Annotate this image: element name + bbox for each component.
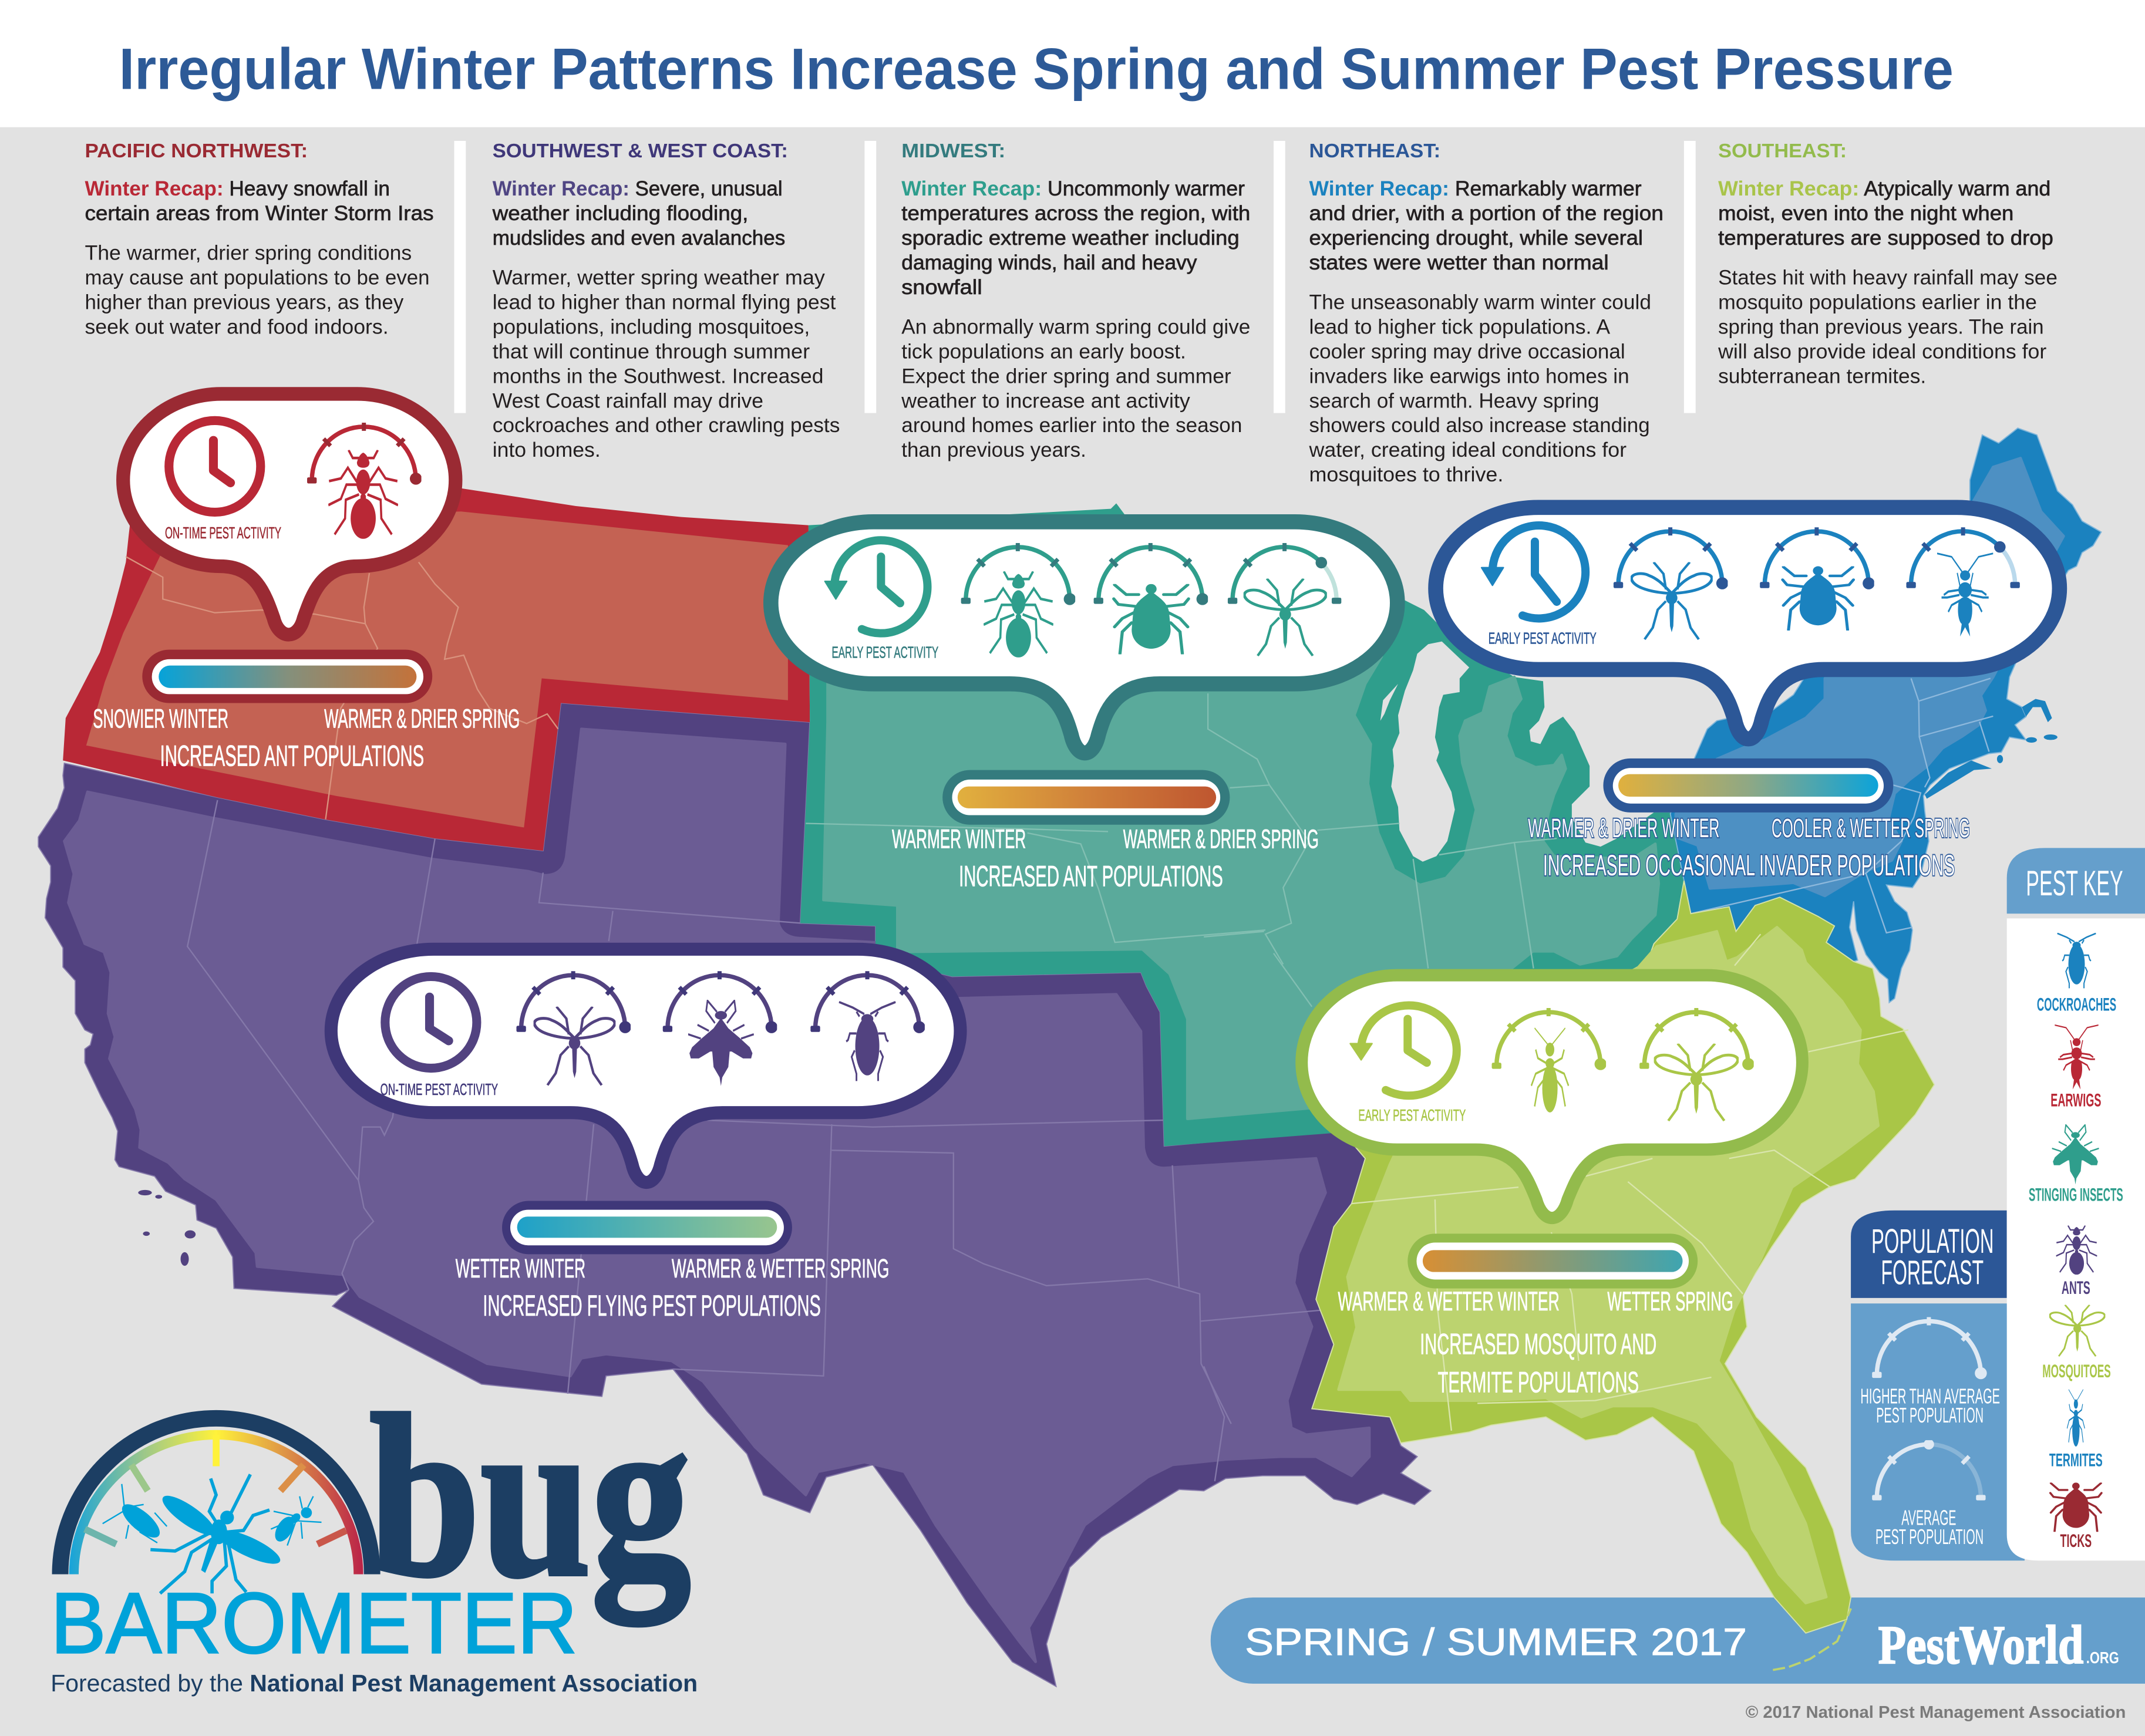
text block: Southeast: moist, even into the night when <box>1718 202 2013 225</box>
termites: TERMITES <box>2049 1449 2103 1470</box>
region: pacific northwest <box>63 465 810 851</box>
region: northeast <box>1671 428 2101 1003</box>
text block: Southeast: SOUTHEAST: <box>1718 140 1847 162</box>
text block: Pacific Northwest: The warmer, drier spring conditions <box>85 242 412 265</box>
text block: Southwest and West Coast <box>492 140 840 461</box>
text block: Northeast: states were wetter than normal <box>1309 251 1609 274</box>
panel: population forecast <box>1851 1211 2025 1560</box>
label: activity: EARLY PEST ACTIVITY <box>831 643 938 662</box>
forecast bar: Southwest <box>502 1201 792 1254</box>
text block: Southeast <box>1718 140 2058 387</box>
icon: gauge and termite <box>1492 1008 1607 1113</box>
callout: Southeast <box>1302 975 1802 1218</box>
heading: FORECAST <box>1881 1254 1984 1292</box>
season banner <box>1211 1597 2145 1684</box>
icon: early clock <box>825 540 928 633</box>
tagline: Forecasted by the National Pest Management Association <box>50 1670 698 1697</box>
region: midwest <box>800 503 1685 1146</box>
forecast labels: Southeast: WARMER & WETTER WINTER <box>1338 1286 1560 1316</box>
text block: Southeast: mosquito populations earlier in the <box>1718 291 2037 314</box>
text block: Southeast: will also provide ideal conditions for <box>1718 340 2047 363</box>
region: southeast <box>1312 881 1934 1633</box>
forecast labels: Southeast: WETTER SPRING <box>1607 1286 1733 1316</box>
text block: Midwest: An abnormally warm spring could give <box>901 315 1250 338</box>
text block: Northeast: search of warmth. Heavy spring <box>1309 389 1599 412</box>
text block: Northeast: water, creating ideal conditions for <box>1309 439 1627 461</box>
icon: gauge and ant <box>961 543 1076 658</box>
stinging insects <box>2029 1125 2123 1205</box>
gauge: average: PEST POPULATION <box>1875 1525 1984 1549</box>
speech bubble <box>771 522 1398 753</box>
icon: gauge and ant <box>307 423 422 539</box>
PestWorld logo: PestWorld <box>1878 1615 2083 1676</box>
forecast labels: Midwest: INCREASED ANT POPULATIONS <box>959 860 1223 893</box>
forecast labels: Pacific Northwest: WARMER & DRIER SPRING <box>324 703 520 733</box>
heading <box>1851 1211 2007 1298</box>
text block: Midwest: damaging winds, hail and heavy <box>901 251 1197 274</box>
text block: Southwest and West Coast: months in the Southwest. Increased <box>493 365 823 387</box>
heading <box>2007 848 2145 913</box>
text block: Midwest: temperatures across the region, with <box>901 202 1250 225</box>
text block: Southwest and West Coast: that will continue through summer <box>493 340 810 363</box>
text block: Southwest and West Coast: populations, including mosquitoes, <box>493 315 810 338</box>
icon: gauge and tick <box>1094 543 1208 653</box>
text block: Northeast: NORTHEAST: <box>1309 140 1440 162</box>
logo mosquito <box>150 1474 284 1593</box>
forecast labels: Midwest <box>892 824 1319 893</box>
text block: Southwest and West Coast: SOUTHWEST & WEST COAST: <box>493 140 788 162</box>
icon: gauge and cockroach <box>810 971 925 1081</box>
text block: Northeast: Winter Recap: Remarkably warmer <box>1309 177 1642 200</box>
forecast labels: Midwest: WARMER & DRIER SPRING <box>1123 824 1319 854</box>
column dividers <box>454 141 1696 413</box>
text block: Southwest and West Coast: Warmer, wetter spring weather may <box>493 267 825 289</box>
text block: Southeast: temperatures are supposed to drop <box>1718 227 2053 250</box>
text block: Pacific Northwest: Winter Recap: Heavy snowfall in <box>85 177 390 200</box>
earwigs: EARWIGS <box>2050 1090 2101 1111</box>
callout: Northeast <box>1436 507 2059 739</box>
Florida Keys <box>1773 1609 1851 1670</box>
icon: early clock <box>1481 525 1585 618</box>
gauge: higher than average: HIGHER THAN AVERAGE <box>1860 1384 2000 1408</box>
text block: Northeast: and drier, with a portion of the region <box>1309 202 1664 225</box>
ticks: TICKS <box>2060 1530 2092 1551</box>
text block: Pacific Northwest: seek out water and food indoors. <box>85 315 389 338</box>
text block: Southeast: spring than previous years. The rain <box>1718 315 2044 338</box>
forecast bar: Southeast <box>1407 1233 1698 1289</box>
copyright: © 2017 National Pest Management Association <box>1746 1703 2126 1722</box>
text block: Southwest and West Coast: into homes. <box>493 439 601 461</box>
speech bubble <box>1436 507 2059 739</box>
text block: Southwest and West Coast: Winter Recap: Severe, unusual <box>493 177 783 200</box>
cockroaches <box>2037 933 2116 1015</box>
text block: Midwest: Expect the drier spring and summer <box>901 365 1231 387</box>
ticks <box>2050 1482 2102 1551</box>
icon: clock <box>385 976 477 1068</box>
logo cockroach <box>103 1484 167 1543</box>
icon: gauge and earwig <box>1906 527 2020 636</box>
text block: Midwest: sporadic extreme weather including <box>901 227 1240 250</box>
forecast bar: Pacific Northwest <box>142 650 432 703</box>
icon: clock <box>169 420 261 512</box>
heading: POPULATION <box>1871 1222 1994 1260</box>
icon: gauge and mosquito <box>1228 543 1341 656</box>
text block: Northeast: cooler spring may drive occasional <box>1309 340 1625 363</box>
logo ant <box>271 1496 321 1546</box>
forecast labels: Southwest: WETTER WINTER <box>456 1253 585 1283</box>
gauge: higher than average <box>1860 1317 2000 1427</box>
text block: Southwest and West Coast: cockroaches and other crawling pests <box>493 414 840 437</box>
forecast labels: Pacific Northwest: INCREASED ANT POPULATIONS <box>160 740 424 773</box>
icon: gauge and mosquito <box>1614 527 1728 639</box>
California islands <box>138 1190 196 1266</box>
icon: gauge and mosquito <box>1639 1008 1755 1121</box>
text block: Southwest and West Coast: mudslides and even avalanches <box>493 227 785 250</box>
text block: Midwest: snowfall <box>901 276 982 299</box>
callout: Pacific Northwest <box>123 394 456 635</box>
forecast labels: Southwest <box>456 1253 889 1322</box>
text block: Southeast: States hit with heavy rainfall may see <box>1718 267 2058 289</box>
speech bubble <box>123 394 456 635</box>
text block: Midwest: Winter Recap: Uncommonly warmer <box>901 177 1245 200</box>
logo gauge <box>60 1418 372 1574</box>
text block: Pacific Northwest: PACIFIC NORTHWEST: <box>85 140 308 162</box>
text block: Midwest: than previous years. <box>901 439 1086 461</box>
forecast labels: Southeast: INCREASED MOSQUITO AND <box>1420 1327 1656 1360</box>
forecast labels: Pacific Northwest: SNOWIER WINTER <box>93 703 228 733</box>
text block: Pacific Northwest: may cause ant populations to be even <box>85 267 430 289</box>
forecast labels: Northeast: WARMER & DRIER WINTER <box>1528 813 1719 843</box>
text block: Midwest: around homes earlier into the season <box>901 414 1242 437</box>
text block: Southwest and West Coast: lead to higher than normal flying pest <box>493 291 836 314</box>
text block: Midwest: weather to increase ant activity <box>901 389 1190 412</box>
mosquitoes <box>2042 1305 2111 1381</box>
ants <box>2056 1225 2097 1298</box>
gauge: higher than average: PEST POPULATION <box>1876 1403 1984 1427</box>
forecast labels: Northeast <box>1528 813 1970 882</box>
label: activity: EARLY PEST ACTIVITY <box>1358 1106 1466 1124</box>
text block: Southeast: Winter Recap: Atypically warm and <box>1718 177 2050 200</box>
forecast labels: Pacific Northwest <box>93 703 520 773</box>
text block: Pacific Northwest <box>85 140 434 338</box>
callout: Midwest <box>771 522 1398 753</box>
text block: Northeast: experiencing drought, while several <box>1309 227 1643 250</box>
speech bubble <box>331 949 960 1182</box>
termites <box>2049 1390 2103 1470</box>
icon: gauge and mosquito <box>516 971 631 1085</box>
text block: Northeast: lead to higher tick populations. A <box>1309 315 1611 338</box>
text block: Northeast <box>1309 140 1664 486</box>
text block: Midwest: MIDWEST: <box>901 140 1005 162</box>
season label: SPRING / SUMMER 2017 <box>1245 1620 1747 1663</box>
icon: gauge and tick <box>1760 527 1875 630</box>
text block: Southwest and West Coast: weather including flooding, <box>492 202 748 225</box>
callout: Southwest and West Coast <box>331 949 960 1182</box>
text block: Northeast: mosquitoes to thrive. <box>1309 463 1503 486</box>
forecast bar: Northeast <box>1603 759 1893 813</box>
title: Irregular Winter Patterns Increase Spring and Summer Pest Pressure <box>119 36 1954 101</box>
forecast labels: Northeast: COOLER & WETTER SPRING <box>1772 813 1970 843</box>
forecast labels: Southwest: WARMER & WETTER SPRING <box>672 1253 889 1283</box>
title band <box>0 0 2145 127</box>
text block: Pacific Northwest: higher than previous years, as they <box>85 291 404 314</box>
label: activity: ON-TIME PEST ACTIVITY <box>165 524 281 542</box>
text block: Midwest: tick populations an early boost. <box>901 340 1186 363</box>
region: southwest and west coast <box>38 703 1431 1687</box>
text block: Southeast: subterranean termites. <box>1718 365 1926 387</box>
text block: Northeast: showers could also increase standing <box>1309 414 1650 437</box>
forecast labels: Southwest: INCREASED FLYING PEST POPULATIONS <box>483 1289 821 1322</box>
forecast labels: Southeast <box>1338 1286 1733 1399</box>
text block: Pacific Northwest: certain areas from Winter Storm Iras <box>85 202 434 225</box>
label: activity: ON-TIME PEST ACTIVITY <box>380 1080 498 1098</box>
speech bubble <box>1302 975 1802 1218</box>
text block: Northeast: invaders like earwigs into homes in <box>1309 365 1629 387</box>
text block: Midwest <box>901 140 1250 461</box>
earwigs <box>2050 1025 2101 1111</box>
icon: gauge and wasp <box>663 971 777 1086</box>
text block: Southwest and West Coast: West Coast rainfall may drive <box>493 389 763 412</box>
gauge: average: AVERAGE <box>1901 1506 1956 1530</box>
panel: pest key <box>2007 848 2145 1560</box>
forecast bar: Midwest <box>942 770 1230 825</box>
wordmark: bug: bug <box>369 1367 691 1629</box>
gauge: average <box>1872 1439 1986 1549</box>
wordmark: barometer: BAROMETER <box>50 1575 577 1671</box>
icon: early clock <box>1350 1006 1457 1095</box>
forecast labels: Southeast: TERMITE POPULATIONS <box>1438 1366 1639 1399</box>
map <box>38 428 2101 1687</box>
ants: ANTS <box>2062 1277 2090 1298</box>
PestWorld logo: .ORG <box>2086 1649 2119 1667</box>
forecast labels: Midwest: WARMER WINTER <box>892 824 1026 854</box>
Cape Cod and Long Island <box>1925 699 2058 799</box>
text block: Northeast: The unseasonably warm winter could <box>1309 291 1651 314</box>
logo: Bug Barometer <box>50 1367 698 1697</box>
label: activity: EARLY PEST ACTIVITY <box>1489 629 1597 647</box>
